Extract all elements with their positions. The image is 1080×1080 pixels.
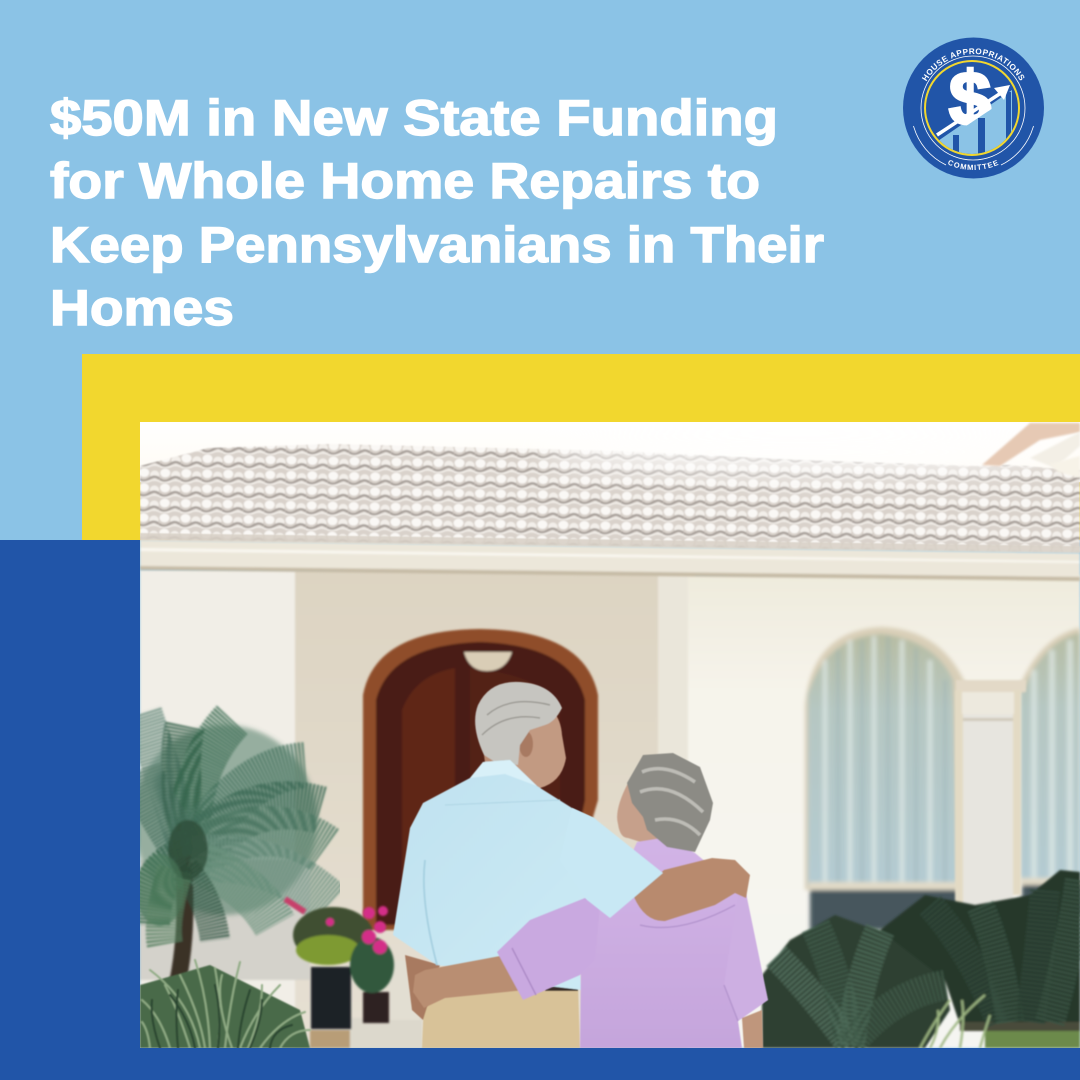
fascia <box>140 540 1080 581</box>
man: hair <box>475 682 562 765</box>
man: ear <box>519 731 533 757</box>
woman: hair <box>627 753 713 852</box>
man <box>392 681 594 1048</box>
man: light blue shirt <box>392 761 594 990</box>
door <box>363 629 598 930</box>
planter with pink flowers <box>285 899 394 1029</box>
title: Keep Pennsylvanians in Their <box>50 217 824 273</box>
column <box>955 680 1026 914</box>
roof <box>140 444 1080 554</box>
man: face <box>517 716 566 788</box>
woman: lavender shirt <box>580 838 768 1048</box>
sky <box>140 422 1080 482</box>
window right <box>1020 630 1080 915</box>
title: for Whole Home Repairs to <box>50 153 760 209</box>
photo: senior couple in front of their home <box>133 422 1080 1048</box>
logo: House Appropriations Committee seal: $ <box>949 57 991 142</box>
logo: House Appropriations Committee seal <box>903 38 1044 178</box>
man: arm at side <box>405 955 440 1020</box>
man's sleeve and arm around woman <box>560 808 750 921</box>
woman: right forearm <box>742 1010 763 1048</box>
frame: yellow block <box>82 354 1080 540</box>
title: $50M in New State Funding <box>50 90 778 146</box>
title <box>50 90 824 336</box>
man: trousers <box>422 985 580 1048</box>
roof gable <box>982 423 1080 466</box>
man: neck <box>484 754 494 762</box>
logo: House Appropriations Committee seal: HOUSE APPROPRIATIONS <box>922 48 1024 82</box>
frame: dark blue block <box>0 540 1080 1080</box>
shrubs right <box>762 870 1080 1048</box>
woman: arm with rolled sleeve <box>413 956 525 1008</box>
foreground grass left <box>140 960 310 1048</box>
woman: face and neck <box>616 784 658 842</box>
palm tree <box>133 712 330 990</box>
title: Homes <box>50 280 234 336</box>
woman <box>413 753 768 1048</box>
window left <box>805 627 968 930</box>
step and stone base <box>308 1019 422 1048</box>
logo: House Appropriations Committee seal: COMMITTEE <box>948 160 998 170</box>
house wall <box>140 570 1080 1048</box>
